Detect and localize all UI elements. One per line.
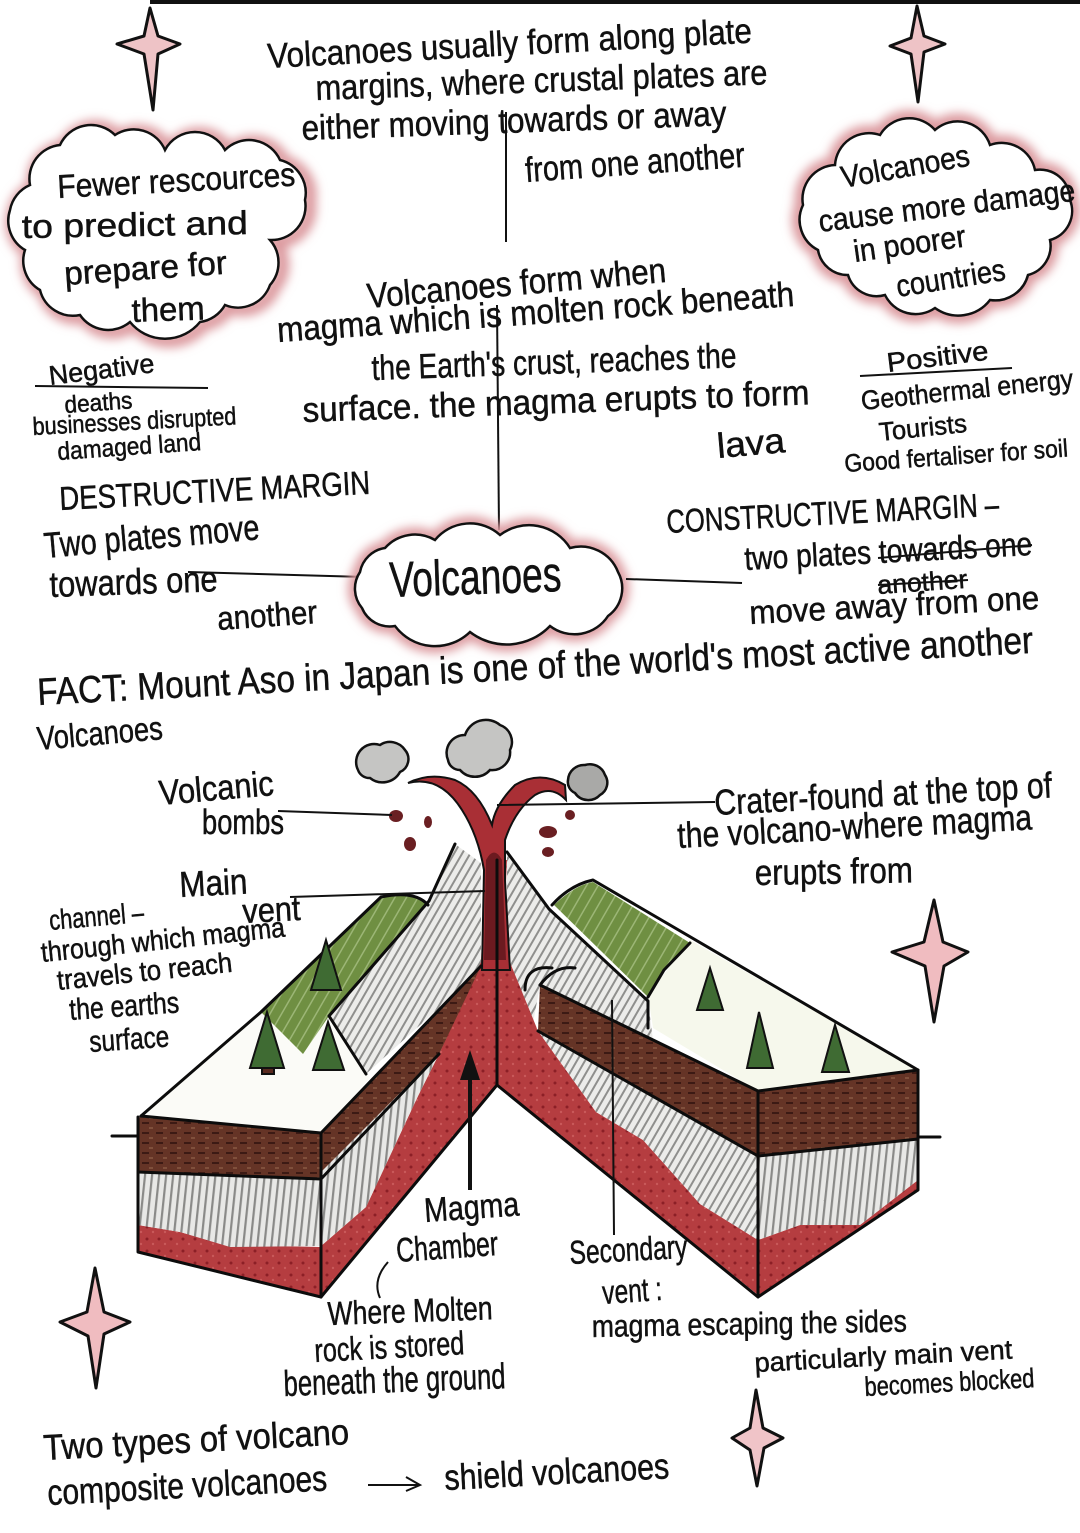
label: volcanic bombs: bombs: [202, 803, 284, 842]
label: secondary vent: becomes blocked: [864, 1363, 1035, 1402]
destructive margin note: Two plates move: [42, 506, 261, 566]
cloud: fewer resources: [8, 125, 310, 341]
constructive margin note: two plates towards one: [743, 525, 1033, 577]
star: bottom right: [732, 1390, 783, 1486]
negative impacts: [32, 348, 237, 466]
label: crater: erupts from: [754, 849, 913, 893]
left block: front magma layer: [138, 1225, 321, 1297]
text: how volcanoes form: [276, 251, 810, 466]
right block: green hillside: [554, 882, 690, 997]
label: magma chamber: Where Molten: [327, 1289, 493, 1332]
arrow: composite to shield: [368, 1477, 420, 1491]
label: secondary vent: [568, 1228, 1035, 1402]
text: how volcanoes form: surface. the magma erupts to form: [302, 373, 810, 430]
label: main vent: travels to reach: [55, 947, 234, 996]
two types of volcano: [42, 1411, 670, 1513]
right block: top surface: [648, 940, 918, 1091]
star: bottom left: [60, 1268, 130, 1388]
label: magma chamber: Magma: [423, 1185, 520, 1230]
volcanic bombs: [389, 810, 575, 857]
connector: cloud to constructive margin: [626, 579, 742, 583]
label: secondary vent: Secondary: [568, 1228, 689, 1271]
fact: Mount Aso: [35, 620, 1034, 757]
label: secondary vent: vent :: [601, 1270, 663, 1311]
cloud: fewer resources: them: [131, 289, 205, 329]
label: secondary vent: particularly main vent: [754, 1335, 1013, 1378]
positive impacts: Tourists: [877, 408, 968, 447]
star: middle right: [892, 900, 968, 1022]
right block: grey cone: [507, 852, 653, 1040]
text: how volcanoes form: Volcanoes form when: [365, 251, 668, 316]
label: crater: [676, 764, 1054, 893]
cloud: more damage in poorer countries: Volcanoes: [838, 138, 972, 195]
star: top left: [117, 8, 180, 110]
main vent and eruption plumes: [408, 777, 566, 970]
right block: front magma layer: [758, 1180, 918, 1297]
constructive margin note: another: [876, 564, 969, 600]
label: main vent: [39, 860, 302, 1059]
label: magma chamber: beneath the ground: [283, 1355, 506, 1404]
label: main vent: through which magma: [39, 911, 287, 968]
magma arrow: [460, 1050, 480, 1190]
left block: brown soil layers: [138, 1117, 321, 1179]
text: how volcanoes form: magma which is molten rock beneath: [276, 275, 795, 350]
star: top right: [890, 6, 945, 102]
positive impacts: [843, 336, 1075, 478]
label: main vent: surface: [88, 1020, 170, 1059]
connector: destructive margin to cloud: [188, 572, 365, 577]
text: where volcanoes form: from one another: [524, 136, 746, 190]
right block: grey rock layers: [758, 1139, 918, 1240]
leader lines: [278, 802, 715, 1235]
label: magma chamber: Chamber: [395, 1225, 499, 1270]
fact: Mount Aso: Volcanoes: [35, 709, 164, 757]
destructive margin note: towards one: [49, 558, 218, 605]
two types of volcano: composite volcanoes: [46, 1457, 328, 1513]
text: where volcanoes form: margins, where crustal plates are: [315, 53, 768, 108]
negative impacts: Negative: [47, 348, 156, 391]
left block: top surface: [141, 1012, 370, 1133]
right block: magma layer side: [497, 860, 758, 1295]
positive impacts: Positive: [885, 336, 990, 378]
text: how volcanoes form: lava: [715, 421, 787, 466]
label: secondary vent: magma escaping the sides: [592, 1304, 907, 1344]
cloud: fewer resources: to predict and: [21, 204, 248, 245]
cloud: volcanoes: Volcanoes: [388, 546, 562, 608]
negative impacts: damaged land: [56, 428, 202, 466]
left block: grey rock layers: [138, 1172, 321, 1247]
trees: [250, 940, 849, 1074]
cloud: more damage in poorer countries: countries: [894, 252, 1008, 304]
block outlines: [112, 844, 940, 1297]
text: how volcanoes form: the Earth's crust, reaches the: [371, 336, 737, 388]
cloud: volcanoes: [355, 523, 622, 646]
destructive margin note: DESTRUCTIVE MARGIN: [58, 464, 371, 517]
label: magma chamber: rock is stored: [313, 1324, 465, 1369]
label: magma chamber: [283, 1185, 520, 1404]
label: main vent: channel –: [48, 897, 145, 936]
text: where volcanoes form: Volcanoes usually form along plate: [266, 12, 753, 76]
two types of volcano: shield volcanoes: [443, 1445, 670, 1498]
destructive margin note: [42, 464, 371, 637]
label: main vent: Main: [178, 860, 248, 905]
cloud: more damage in poorer countries: [800, 118, 1077, 316]
cloud: fewer resources: prepare for: [63, 244, 228, 292]
smoke clouds: [356, 720, 607, 800]
text: where volcanoes form: [266, 12, 768, 190]
volcano cross-section diagram: [112, 720, 940, 1297]
label: volcanic bombs: Volcanic: [157, 764, 275, 813]
label: main vent: the earths: [68, 986, 180, 1027]
cloud: fewer resources: Fewer rescources: [56, 156, 296, 205]
text: where volcanoes form: either moving towards or away: [301, 94, 727, 148]
destructive margin note: another: [216, 593, 318, 637]
left block: grey cone: [329, 844, 481, 1074]
negative impacts: deaths: [64, 387, 133, 419]
label: main vent: vent: [241, 890, 302, 931]
connector: centre text to volcanoes cloud: [497, 305, 499, 530]
right block: brown soil layers: [758, 1070, 918, 1156]
left block: green hillside: [261, 895, 428, 1054]
left block: magma layer side: [321, 860, 507, 1297]
label: volcanic bombs: [157, 764, 284, 842]
constructive margin note: move away from one: [748, 579, 1040, 631]
negative impacts: businesses disrupted: [32, 402, 237, 441]
constructive margin note: [665, 486, 1040, 631]
two types of volcano: Two types of volcano: [42, 1411, 350, 1468]
cloud: more damage in poorer countries: in poorer: [851, 219, 968, 269]
connector: top text to centre text: [505, 112, 507, 242]
